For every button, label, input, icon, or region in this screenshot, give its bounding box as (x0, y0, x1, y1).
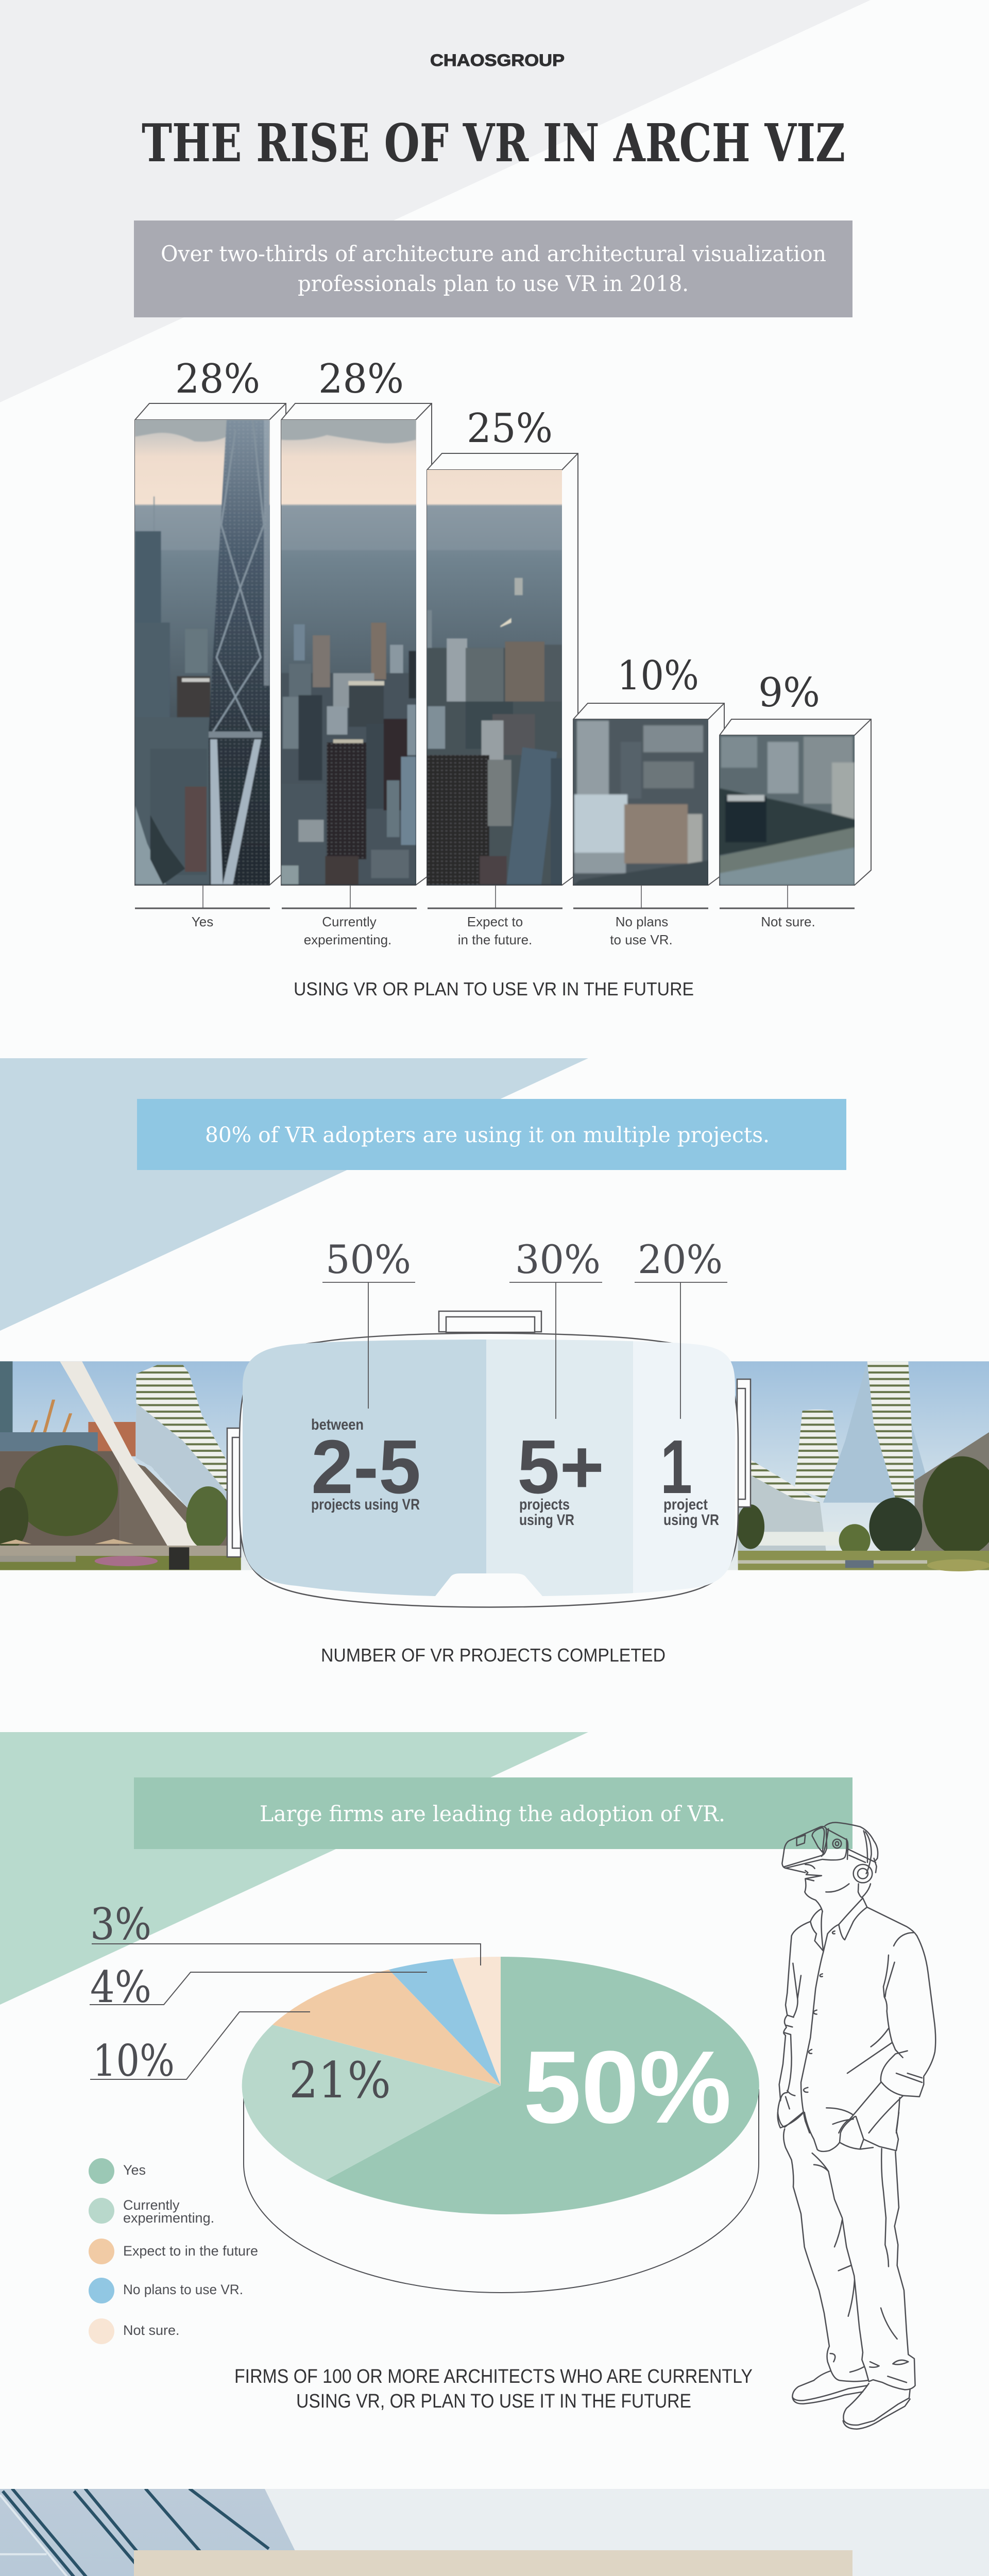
photo: glass facade background (0, 2488, 989, 2576)
segment text: 2-5: between (311, 1416, 364, 1433)
blue triangle (0, 1058, 588, 1331)
bar category labels: Not sure. (761, 914, 815, 929)
facade cross lines left (0, 2495, 68, 2576)
segment text: 2-5: 2-5 (311, 1425, 421, 1510)
slice: yes 50% (326, 1957, 759, 2214)
heading text: 80% of VR adopters are using it on multiple projects. (205, 1123, 770, 1147)
pie percentage labels: 4% (90, 1962, 151, 2012)
pie percentage labels: 21% (289, 2052, 391, 2109)
bar category labels: No plans (616, 914, 668, 929)
bar category labels: Yes (192, 914, 213, 929)
bar category labels: Expect to (467, 914, 523, 929)
segment text: 1 (660, 1425, 719, 1529)
bar value labels: 10% (617, 653, 699, 699)
right scene (737, 1361, 989, 1571)
pie chart (90, 1899, 759, 2293)
panel: multiple projects heading (137, 1099, 846, 1170)
leader percentages: 20% (638, 1236, 723, 1282)
slice: no plans 4% (389, 1959, 501, 2086)
bar category labels: experimenting. (304, 932, 391, 947)
photo band: buildings (0, 1361, 989, 1571)
panel: large firms heading (134, 1777, 852, 1849)
pie side (244, 2089, 759, 2293)
caption: number of projects: NUMBER OF VR PROJECTS COMPLETED (321, 1645, 666, 1666)
headset graphic (227, 1236, 751, 1607)
pie legend: Yes (123, 2162, 146, 2178)
segment text: 2-5: projects using VR (311, 1496, 420, 1513)
leader lines (322, 1282, 727, 1419)
left facade (0, 2489, 295, 2576)
bar value labels: 28% (318, 356, 404, 402)
logo: Chaos Group top: CHAOSGROUP (430, 51, 565, 70)
pie legend: Not sure. (123, 2323, 180, 2338)
leader percentages: 30% (515, 1236, 601, 1282)
leader lines (90, 1944, 481, 2079)
segment text: 1: project (663, 1496, 708, 1513)
big 50% label: 50% (523, 2030, 731, 2145)
illustration: man with VR headset (778, 1822, 935, 2429)
bar category labels (192, 914, 815, 947)
bar value labels: 9% (758, 670, 820, 716)
bar axis ticks (135, 886, 855, 908)
heading text: Large firms are leading the adoption of VR. (260, 1801, 725, 1826)
bar outlines (135, 403, 871, 885)
caption: firms: USING VR, OR PLAN TO USE IT IN THE FUTURE (296, 2391, 691, 2412)
bar category labels: in the future. (458, 932, 532, 947)
lower body (778, 2112, 915, 2429)
facade grid lines left (2, 2489, 270, 2576)
panel: software heading (134, 2550, 852, 2576)
green triangle (0, 1732, 588, 2005)
slice: currently 21% (242, 2025, 501, 2180)
pie percentage labels: 10% (93, 2036, 175, 2086)
headset lens segments (237, 1334, 741, 1602)
intro text (161, 241, 826, 296)
pie legend: experimenting. (123, 2210, 214, 2226)
bar category labels: Currently (322, 914, 377, 929)
pie legend: Expect to in the future (123, 2243, 258, 2259)
panel: intro heading (134, 221, 852, 317)
pie percentage labels (90, 1899, 391, 2109)
pie legend: Currently (123, 2197, 180, 2213)
slice: expect 10% (272, 1970, 501, 2086)
top grey triangle (0, 0, 871, 402)
caption: firms (234, 2366, 753, 2412)
chart: 3D photo bars (135, 356, 871, 947)
segment text: 1: 1 (660, 1425, 692, 1510)
segment text: 1: using VR (663, 1512, 719, 1529)
pie percentage labels: 3% (90, 1899, 151, 1950)
bar value labels (175, 356, 820, 716)
segment text: 5+: using VR (519, 1512, 574, 1529)
leader percentages: 50% (326, 1236, 411, 1282)
pie legend: No plans to use VR. (123, 2282, 243, 2297)
bar value labels: 28% (175, 356, 260, 402)
headset body (240, 1333, 738, 1607)
bar category labels: to use VR. (610, 932, 673, 947)
city photo in bars (135, 420, 855, 885)
headset top strap (439, 1311, 541, 1332)
segment text: 5+: projects (519, 1496, 570, 1513)
left scene (0, 1361, 241, 1570)
upper body (778, 1822, 935, 2133)
chart caption: using VR: USING VR OR PLAN TO USE VR IN THE FUTURE (294, 978, 694, 999)
pie legend (89, 2158, 258, 2344)
intro text: professionals plan to use VR in 2018. (298, 271, 689, 296)
headset side tabs (227, 1379, 751, 1557)
bar 4 and 5 photo pieces (573, 719, 855, 885)
bar value labels: 25% (467, 405, 553, 452)
segment text: 5+: 5+ (517, 1425, 604, 1510)
caption: firms: FIRMS OF 100 OR MORE ARCHITECTS WHO ARE CURRENTLY (234, 2366, 753, 2387)
slice: not sure 3% (453, 1957, 501, 2086)
intro text: Over two-thirds of architecture and architectural visualization (161, 241, 826, 266)
leader percentages (326, 1236, 723, 1282)
